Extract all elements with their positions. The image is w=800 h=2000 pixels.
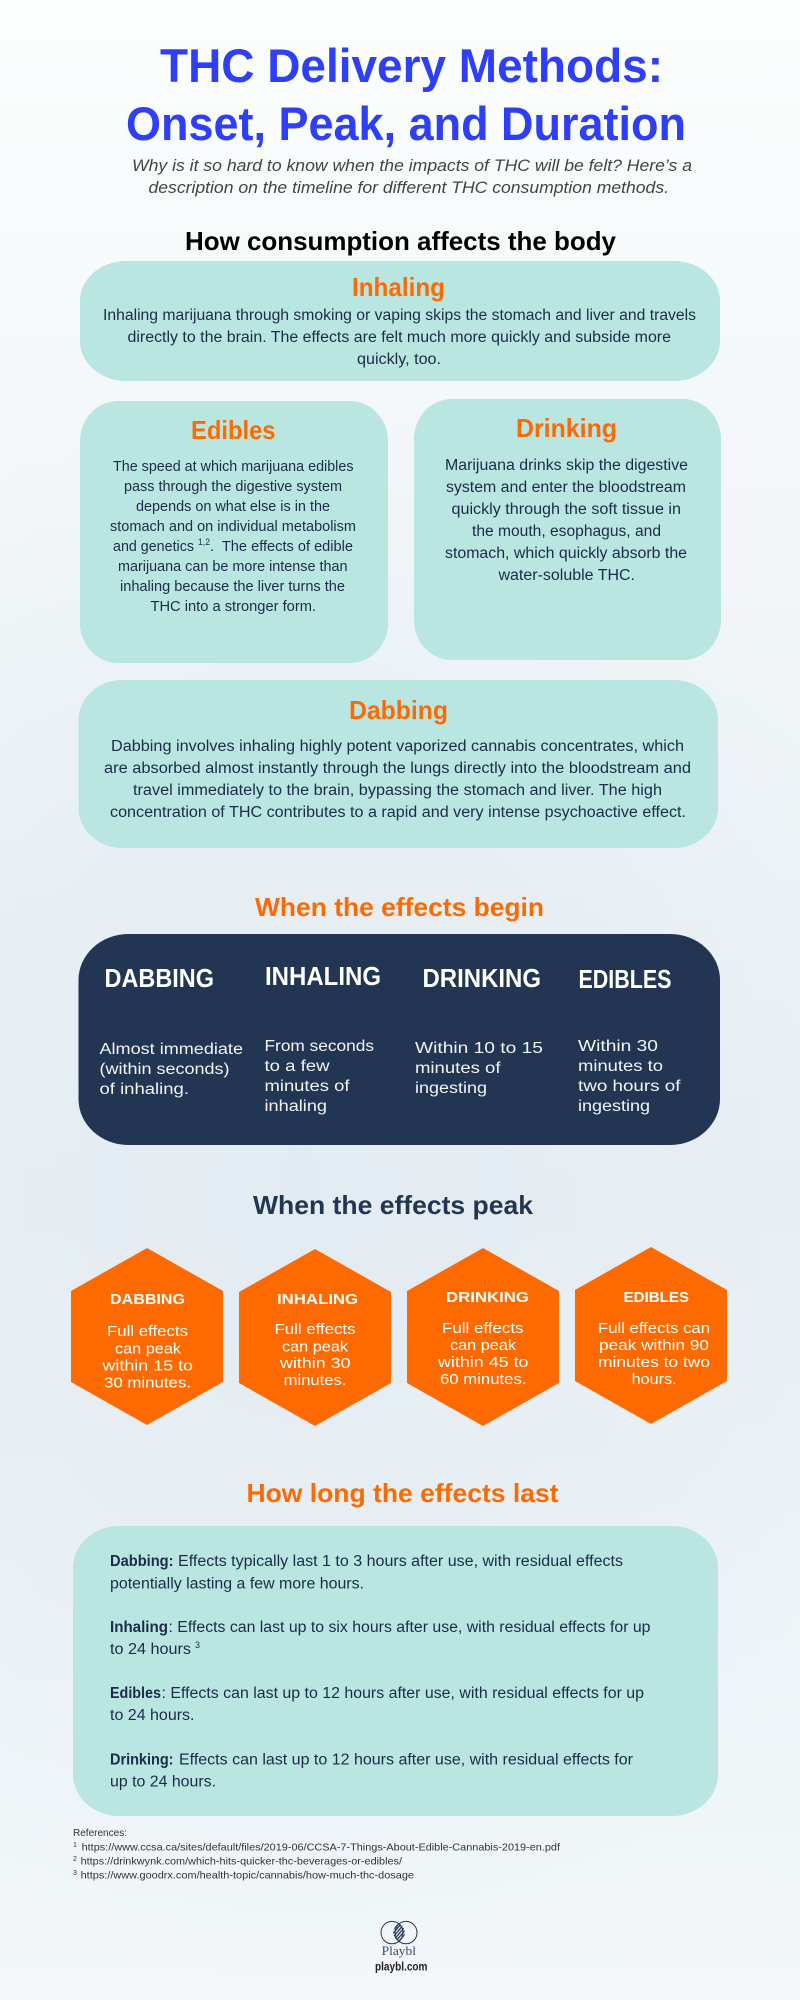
onset column: edibles: two hours of — [578, 1078, 681, 1095]
references: https://www.goodrx.com/health-topic/cannabis/how-much-thc-dosage — [81, 1870, 414, 1882]
drinking body text: stomach, which quickly absorb the — [445, 545, 687, 562]
inhaling body text — [103, 307, 696, 368]
onset column: inhaling: inhaling — [264, 1098, 327, 1115]
onset column: edibles: EDIBLES — [578, 964, 672, 994]
duration: drinking: Effects can last up to 12 hours after use, with residual effects for — [179, 1752, 633, 1768]
hexagon: inhaling: minutes. — [284, 1372, 346, 1389]
drinking body text: water-soluble THC. — [497, 567, 635, 584]
edibles body text: . The effects of edible — [210, 539, 353, 555]
onset column: drinking: DRINKING — [422, 963, 541, 993]
drinking heading: Drinking — [516, 413, 617, 443]
title — [126, 39, 686, 150]
edibles body text: stomach and on individual metabolism — [110, 519, 356, 535]
hexagon: drinking: can peak — [450, 1337, 517, 1354]
hexagon: dabbing: within 15 to — [101, 1358, 193, 1374]
drinking body text: system and enter the bloodstream — [446, 479, 686, 496]
drinking body text — [445, 457, 688, 584]
heading: how long the effects last: How long the effects last — [246, 1478, 559, 1508]
subtitle: description on the timeline for different THC consumption methods. — [148, 179, 669, 197]
onset column: drinking: Within 10 to 15 — [415, 1040, 543, 1057]
duration: drinking: Drinking: — [110, 1752, 174, 1768]
hexagon: inhaling: INHALING — [277, 1292, 358, 1308]
title: Onset, Peak, and Duration — [126, 97, 686, 150]
references: 2 — [73, 1856, 77, 1863]
inhaling heading: Inhaling — [352, 272, 445, 302]
onset column: drinking: minutes of — [415, 1060, 501, 1077]
hexagon: edibles: hours. — [632, 1371, 677, 1388]
duration: inhaling: 3 — [195, 1640, 200, 1651]
inhaling body text: Inhaling marijuana through smoking or vaping skips the stomach and liver and travels — [103, 307, 696, 324]
duration: drinking — [110, 1752, 633, 1790]
hexagon: inhaling: within 30 — [279, 1355, 350, 1372]
duration: edibles: Edibles — [110, 1685, 161, 1702]
onset column: inhaling: to a few — [264, 1058, 330, 1075]
hexagon: edibles: minutes to two — [598, 1354, 710, 1371]
panel: drinking — [414, 399, 721, 660]
subtitle — [132, 157, 692, 197]
hexagon: dabbing: 30 minutes. — [104, 1374, 191, 1392]
website: playbl.com — [375, 1962, 428, 1974]
hexagon: dabbing: Full effects — [107, 1323, 188, 1340]
duration: inhaling — [110, 1619, 650, 1658]
panel: inhaling — [80, 261, 720, 381]
onset column: inhaling: INHALING — [265, 961, 381, 991]
panel: edibles — [80, 401, 388, 663]
dabbing body text: are absorbed almost instantly through the lungs directly into the bloodstream and — [104, 760, 691, 777]
dabbing heading: Dabbing — [349, 695, 448, 725]
inhaling body text: quickly, too. — [357, 351, 441, 368]
edibles body text: marijuana can be more intense than — [118, 559, 348, 575]
edibles body text — [110, 459, 356, 615]
duration: edibles: : Effects can last up to 12 hours after use, with residual effects for up — [162, 1685, 644, 1702]
subtitle: Why is it so hard to know when the impacts of THC will be felt? Here’s a — [132, 157, 692, 175]
edibles heading: Edibles — [191, 415, 276, 445]
hexagon: drinking — [407, 1248, 559, 1426]
edibles body text: THC into a stronger form. — [150, 599, 316, 615]
duration: dabbing: potentially lasting a few more hours. — [110, 1576, 364, 1592]
edibles body text: depends on what else is in the — [136, 499, 330, 515]
duration: edibles — [110, 1685, 644, 1724]
onset column: dabbing: of inhaling. — [100, 1081, 189, 1098]
panel: dabbing — [78, 680, 718, 848]
onset column: dabbing: DABBING — [104, 963, 214, 993]
onset column: inhaling: From seconds — [264, 1038, 374, 1055]
hexagon: inhaling — [239, 1249, 391, 1426]
onset column: edibles: ingesting — [578, 1098, 650, 1115]
references: 3 — [73, 1870, 77, 1877]
references: https://drinkwynk.com/which-hits-quicker-thc-beverages-or-edibles/ — [81, 1856, 402, 1868]
heading: when the effects begin: When the effects begin — [255, 892, 544, 922]
references — [73, 1827, 560, 1882]
onset column: inhaling — [264, 961, 381, 1115]
onset column: drinking: ingesting — [415, 1080, 487, 1097]
onset column: edibles: Within 30 — [578, 1038, 658, 1055]
logo mark: overlapping circles — [381, 1921, 417, 1944]
hexagon: edibles: peak within 90 — [599, 1337, 709, 1354]
onset column: inhaling: minutes of — [264, 1078, 350, 1095]
duration: edibles: to 24 hours. — [110, 1707, 194, 1724]
hexagon: dabbing: can peak — [115, 1340, 182, 1358]
dabbing body text: concentration of THC contributes to a rapid and very intense psychoactive effect. — [110, 804, 686, 821]
duration: inhaling: Inhaling — [110, 1619, 168, 1636]
edibles body text: inhaling because the liver turns the — [120, 579, 345, 595]
onset column: dabbing: Almost immediate — [100, 1041, 243, 1058]
hexagon: dabbing — [71, 1248, 223, 1425]
edibles body text: and genetics — [113, 539, 194, 555]
onset column: edibles — [578, 964, 681, 1115]
duration: dabbing — [110, 1553, 623, 1592]
duration: dabbing: Effects typically last 1 to 3 hours after use, with residual effects — [178, 1553, 623, 1570]
panel: onset timeline — [78, 934, 720, 1145]
drinking body text: quickly through the soft tissue in — [452, 501, 681, 518]
duration: inhaling: to 24 hours — [110, 1641, 191, 1658]
inhaling body text: directly to the brain. The effects are felt much more quickly and subside more — [128, 329, 671, 346]
onset column: edibles: minutes to — [578, 1058, 663, 1075]
references: References: — [73, 1827, 127, 1839]
drinking body text: the mouth, esophagus, and — [472, 523, 661, 540]
onset column: dabbing — [100, 963, 243, 1098]
duration: drinking: up to 24 hours. — [110, 1774, 216, 1790]
hexagon: drinking: 60 minutes. — [440, 1371, 526, 1388]
hexagon: drinking: DRINKING — [446, 1290, 529, 1306]
logo: Playbl — [375, 1921, 428, 1974]
edibles body text: 1,2 — [198, 537, 210, 547]
hexagon: dabbing: DABBING — [110, 1292, 185, 1308]
dabbing body text: travel immediately to the brain, bypassing the stomach and liver. The high — [133, 782, 662, 799]
references: 1 — [73, 1842, 77, 1849]
onset column: dabbing: (within seconds) — [100, 1061, 230, 1078]
references: https://www.ccsa.ca/sites/default/files/2019-06/CCSA-7-Things-About-Edible-Cannabis-2019-en.pdf — [82, 1842, 560, 1854]
duration: dabbing: Dabbing: — [110, 1553, 174, 1570]
logo wordmark: Playbl — [382, 1943, 416, 1958]
hexagon: drinking: Full effects — [442, 1320, 524, 1337]
panel: duration — [73, 1526, 718, 1816]
hexagon: inhaling: can peak — [282, 1338, 349, 1356]
dabbing body text — [104, 738, 691, 821]
hexagon: inhaling: Full effects — [274, 1321, 356, 1338]
title: THC Delivery Methods: — [160, 39, 663, 92]
hexagon: edibles: EDIBLES — [624, 1290, 689, 1306]
hexagon: edibles: Full effects can — [598, 1320, 710, 1337]
hexagon: drinking: within 45 to — [437, 1354, 528, 1371]
dabbing body text: Dabbing involves inhaling highly potent vaporized cannabis concentrates, which — [111, 738, 684, 755]
hexagon: edibles — [575, 1247, 727, 1424]
edibles body text: pass through the digestive system — [124, 479, 342, 495]
edibles body text: The speed at which marijuana edibles — [113, 459, 354, 475]
heading: when the effects peak: When the effects peak — [253, 1190, 534, 1220]
heading: how consumption affects the body: How consumption affects the body — [185, 226, 617, 256]
drinking body text: Marijuana drinks skip the digestive — [445, 457, 688, 474]
onset column: drinking — [415, 963, 543, 1097]
duration: inhaling: : Effects can last up to six hours after use, with residual effects for up — [168, 1619, 650, 1636]
